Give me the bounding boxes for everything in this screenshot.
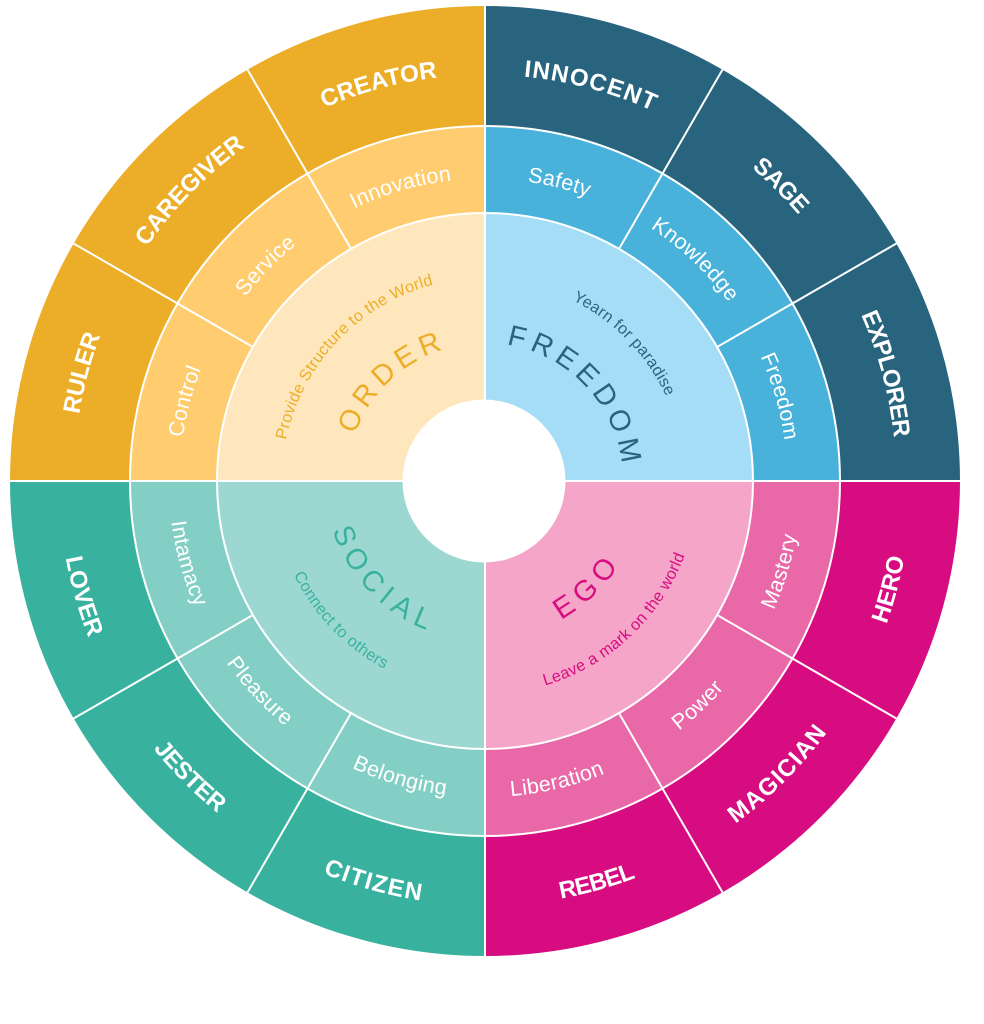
label: pleasure: Pleasure <box>227 656 290 724</box>
heading: freedom: FREEDOM <box>508 325 642 462</box>
label: lover: LOVER <box>66 556 102 638</box>
label: jester: JESTER <box>155 742 226 813</box>
label: caregiver: CAREGIVER <box>136 136 245 244</box>
label: explorer: EXPLORER <box>862 310 910 438</box>
outer ring labels <box>63 60 910 900</box>
label: sage: SAGE <box>754 158 810 214</box>
label: belonging: Belonging <box>353 755 446 798</box>
tagline: ego: Leave a mark on the world <box>542 552 684 686</box>
label: intamacy: Intamacy <box>172 522 206 604</box>
label: hero: HERO <box>871 556 903 623</box>
label: creator: CREATOR <box>321 62 437 106</box>
label: ruler: RULER <box>63 332 100 413</box>
label: freedom: Freedom <box>761 352 796 439</box>
label: magician: MAGICIAN <box>726 724 826 823</box>
label: innovation: Innovation <box>350 169 450 208</box>
label: knowledge: Knowledge <box>652 216 736 300</box>
tagline: social: Connect to others <box>296 572 387 668</box>
label: innocent: INNOCENT <box>525 60 659 109</box>
quadrant: order <box>10 6 485 481</box>
heading: social: SOCIAL <box>334 526 426 630</box>
tagline: freedom: Yearn for paradise <box>576 290 672 395</box>
heading: order: ORDER <box>340 333 442 430</box>
label: liberation: Liberation <box>511 764 604 796</box>
middle ring labels <box>169 168 800 798</box>
quadrant: social <box>10 481 485 956</box>
heading: ego: EGO <box>552 559 614 619</box>
label: control: Control <box>169 364 201 436</box>
label: mastery: Mastery <box>760 534 800 609</box>
quadrant: ego <box>485 481 960 956</box>
label: service: Service <box>236 238 294 294</box>
inner ring labels <box>276 274 684 686</box>
label: rebel: REBEL <box>559 866 636 898</box>
label: power: Power <box>671 680 722 730</box>
label: citizen: CITIZEN <box>326 860 422 900</box>
center hole <box>402 400 566 562</box>
quadrant: freedom <box>485 6 960 481</box>
tagline: order: Provide Structure to the World <box>276 274 432 439</box>
label: safety: Safety <box>528 168 592 198</box>
